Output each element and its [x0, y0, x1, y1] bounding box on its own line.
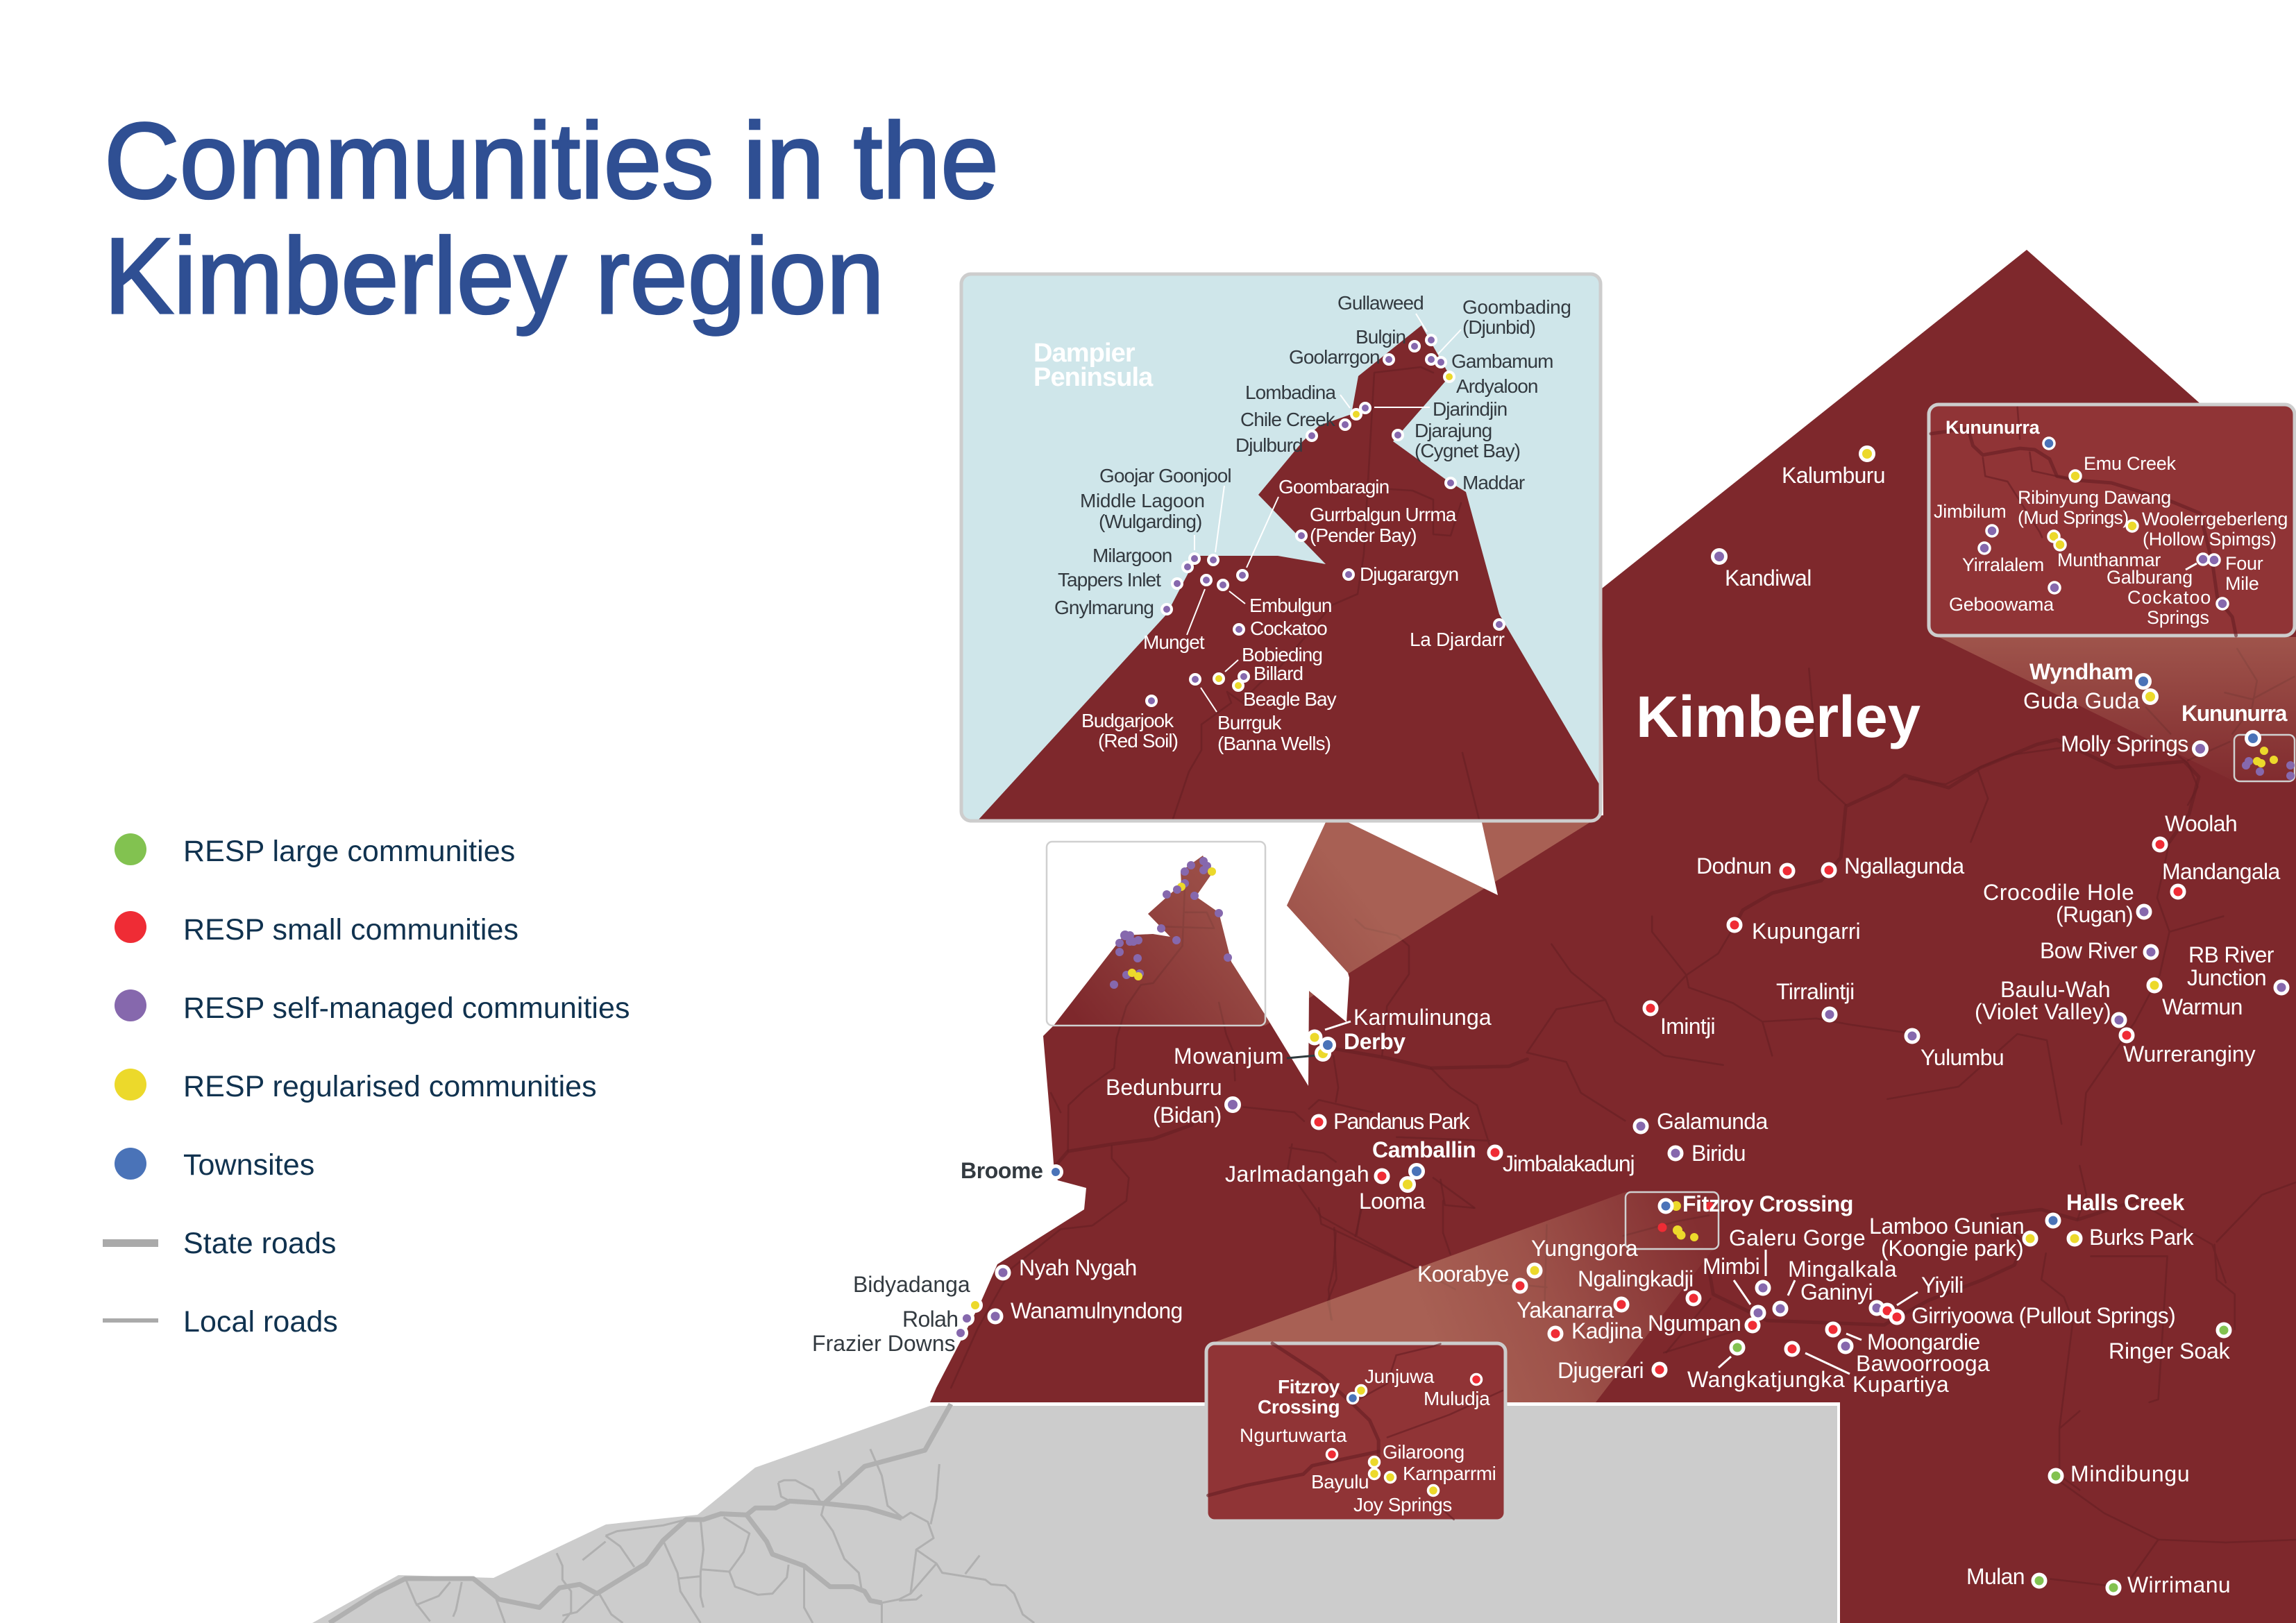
- small locator box: Dampier Peninsula: [1047, 842, 1265, 1026]
- Yakanarra: Yakanarra: [1517, 1298, 1614, 1323]
- Jimbalakadunj: Jimbalakadunj: [1503, 1151, 1635, 1176]
- Geboowama: [1949, 582, 2060, 615]
- map: grey neighbouring land: [312, 1406, 1837, 1623]
- title: Communities in the: [104, 101, 999, 221]
- Woolah: Woolah: [2165, 811, 2237, 836]
- Gurrbalgun Urrma: (Pender Bay): [1310, 525, 1417, 546]
- title: [104, 101, 999, 336]
- Baulu-Wah: [1975, 977, 2125, 1026]
- Burks Park: Burks Park: [2089, 1225, 2195, 1250]
- Galeru Gorge: Galeru Gorge: [1729, 1225, 1865, 1250]
- zoom wedge: Fitzroy Crossing: [1206, 1192, 1719, 1402]
- Fitzroy Crossing town: Crossing: [1258, 1396, 1340, 1418]
- Djarajung: Djarajung: [1415, 420, 1492, 441]
- Bawoorrooga: Bawoorrooga: [1856, 1351, 1990, 1376]
- Cockatoo Springs: Cockatoo: [2127, 587, 2211, 608]
- Mimbi: Mimbi: [1703, 1254, 1759, 1279]
- Galeru Gorge: [1729, 1225, 1865, 1294]
- legend: RESP small communities: RESP small communities: [183, 913, 518, 946]
- Ardyaloon: Ardyaloon: [1456, 375, 1538, 397]
- Wangkatjungka: Wangkatjungka: [1687, 1367, 1845, 1392]
- RB River Junction: Junction: [2187, 965, 2266, 990]
- Moongardie: [1827, 1323, 1980, 1354]
- Yulumbu: Yulumbu: [1921, 1045, 2004, 1070]
- Djugerari: Djugerari: [1558, 1358, 1644, 1383]
- Karnparrmi: Karnparrmi: [1403, 1463, 1496, 1484]
- Embulgun: Embulgun: [1249, 595, 1331, 616]
- Milargoon: [1092, 545, 1192, 572]
- La Djardarr: La Djardarr: [1410, 629, 1505, 650]
- Wangkatjungka: [1687, 1341, 1845, 1392]
- Munget: [1143, 575, 1211, 653]
- inset background: [1206, 1343, 1505, 1521]
- title: Kimberley region: [104, 216, 884, 336]
- panel: Fitzroy Crossing inset: [1206, 1343, 1505, 1521]
- Gambamum: Gambamum: [1451, 350, 1553, 372]
- Tirralintji: Tirralintji: [1776, 979, 1855, 1004]
- Lombadina: [1245, 382, 1361, 419]
- Yiyili: Yiyili: [1921, 1273, 1964, 1298]
- inset border: [961, 274, 1601, 821]
- inset heading: Peninsula: [1033, 363, 1154, 392]
- legend: Local roads: [103, 1305, 338, 1339]
- Gullaweed: Gullaweed: [1337, 292, 1424, 314]
- Dodnun: Dodnun: [1696, 853, 1771, 878]
- Mowanjum: Mowanjum: [1174, 1044, 1283, 1069]
- Kadjina: Kadjina: [1571, 1318, 1643, 1343]
- Frazier Downs: Frazier Downs: [812, 1331, 955, 1356]
- Lamboo Gunian: (Koongie park): [1881, 1236, 2023, 1261]
- Bawoorrooga: [1839, 1340, 1990, 1376]
- Biridu: Biridu: [1691, 1141, 1746, 1166]
- Woolerrgeberleng: (Hollow Spimgs): [2143, 529, 2277, 550]
- Yiyili: [1871, 1273, 1964, 1317]
- legend: RESP self-managed communities: RESP self-managed communities: [183, 992, 630, 1025]
- Ribinyung Dawang: (Mud Springs): [2018, 507, 2129, 528]
- legend: [103, 833, 630, 1339]
- inset roads: [1931, 407, 2236, 636]
- Cockatoo Springs: [2127, 587, 2228, 628]
- legend: State roads: [103, 1227, 336, 1260]
- legend: State roads: State roads: [183, 1227, 336, 1260]
- Guda Guda: Guda Guda: [2023, 688, 2140, 713]
- Geboowama: Geboowama: [1949, 594, 2054, 615]
- legend: Townsites: Townsites: [183, 1148, 314, 1182]
- Djarindjin: [1360, 398, 1507, 420]
- Mandangala: Mandangala: [2162, 859, 2280, 884]
- small locator box: Kununurra: [2234, 735, 2295, 781]
- Ngalingkadji: [1578, 1266, 1700, 1305]
- inset heading: [1033, 339, 1154, 392]
- Crocodile Hole: (Rugan): [2056, 902, 2133, 927]
- Kununurra: Kununurra: [2181, 701, 2288, 726]
- Mandangala: [2162, 859, 2280, 898]
- Galamunda: Galamunda: [1657, 1109, 1768, 1134]
- legend: RESP large communities: RESP large communities: [183, 835, 515, 868]
- Burrguk: [1190, 674, 1331, 754]
- Bow River: Bow River: [2040, 938, 2138, 963]
- Warmun: [2148, 979, 2243, 1019]
- Koorabye: [1417, 1261, 1526, 1292]
- Ringer Soak: Ringer Soak: [2109, 1339, 2231, 1363]
- Djarajung: [1393, 420, 1520, 461]
- Halls Creek: Halls Creek: [2066, 1190, 2185, 1215]
- Koorabye: Koorabye: [1417, 1261, 1509, 1286]
- Ngurtuwarta: [1240, 1425, 1347, 1460]
- panel: Dampier Peninsula inset: [961, 274, 1601, 821]
- Goombaragin: [1238, 476, 1389, 580]
- Girriyoowa: Girriyoowa (Pullout Springs): [1911, 1303, 2175, 1328]
- Moongardie: Moongardie: [1867, 1329, 1980, 1354]
- Burrguk: (Banna Wells): [1217, 733, 1331, 754]
- Gnylmarung: Gnylmarung: [1054, 597, 1154, 618]
- Djarajung: (Cygnet Bay): [1415, 440, 1520, 461]
- Woolah: [2154, 811, 2237, 851]
- Mingalkala: [1788, 1257, 1897, 1295]
- Bedunburru: [1106, 1075, 1240, 1128]
- Jimbilum: [1934, 501, 2007, 536]
- Imintji: [1644, 1002, 1715, 1039]
- Bedunburru: (Bidan): [1153, 1103, 1222, 1128]
- Rolah: Rolah: [902, 1307, 958, 1332]
- Goolarrgon: Goolarrgon: [1289, 346, 1380, 368]
- Gilaroong: Gilaroong: [1383, 1441, 1464, 1463]
- Kununurra town: [1945, 417, 2054, 449]
- Kandiwal: [1713, 550, 1812, 590]
- Kalumburu: Kalumburu: [1782, 463, 1885, 488]
- Karmulinunga: [1308, 1005, 1492, 1044]
- map: Kimberley region: [930, 250, 2296, 1623]
- Lombadina: Lombadina: [1245, 382, 1336, 403]
- Muludja: [1424, 1374, 1490, 1409]
- Embulgun: [1218, 580, 1331, 616]
- Galburang: [2107, 554, 2209, 588]
- Crocodile Hole: [1983, 880, 2150, 927]
- legend: Local roads: Local roads: [183, 1305, 338, 1339]
- Ganinyi: [1774, 1280, 1873, 1315]
- map: Kimberley roads: [951, 649, 2296, 1586]
- communities: main map: [812, 447, 2288, 1597]
- Budgarjook: [1081, 696, 1178, 751]
- inset roads: [1172, 367, 1479, 821]
- Bulgin: Bulgin: [1356, 326, 1406, 348]
- panel: Kununurra inset: [1929, 405, 2295, 636]
- Crocodile Hole: Crocodile Hole: [1983, 880, 2134, 905]
- Ngallagunda: Ngallagunda: [1844, 853, 1964, 878]
- Tappers Inlet: Tappers Inlet: [1058, 569, 1161, 590]
- inset roads: [1208, 1343, 1503, 1520]
- Gullaweed: [1337, 292, 1436, 345]
- inset background: [1929, 405, 2295, 636]
- Four Mile: Mile: [2225, 573, 2259, 594]
- Galburang: Galburang: [2107, 567, 2193, 588]
- RB River Junction: RB River: [2188, 942, 2274, 967]
- Middle Lagoon: (Wulgarding): [1099, 511, 1201, 532]
- RB River Junction: [2187, 942, 2288, 994]
- small locator box: Fitzroy Crossing: [1626, 1192, 1719, 1249]
- Kununurra: [2181, 701, 2288, 745]
- Goombading: (Djunbid): [1462, 316, 1535, 338]
- Yungngora: [1528, 1236, 1638, 1277]
- Woolerrgeberleng: Woolerrgeberleng: [2142, 509, 2288, 529]
- Wirrimanu: Wirrimanu: [2127, 1572, 2230, 1597]
- Goombading: Goombading: [1462, 296, 1571, 318]
- Bulgin: [1356, 326, 1419, 351]
- Ngumpan: Ngumpan: [1648, 1311, 1741, 1336]
- Junjuwa: Junjuwa: [1365, 1366, 1435, 1387]
- Djarindjin: Djarindjin: [1433, 398, 1507, 420]
- Munthanmar: Munthanmar: [2057, 550, 2161, 570]
- Fitzroy Crossing town: Fitzroy: [1278, 1376, 1340, 1397]
- Yirralalem: [1962, 543, 2044, 575]
- Yirralalem: Yirralalem: [1962, 554, 2044, 575]
- Kupartiya: Kupartiya: [1852, 1372, 1949, 1397]
- Middle Lagoon: [1080, 490, 1204, 563]
- inset land: [979, 325, 1599, 819]
- Maddar: Maddar: [1462, 472, 1525, 493]
- map: grey land roads: [330, 1404, 1034, 1623]
- Djugarargyn: Djugarargyn: [1360, 563, 1458, 585]
- Emu Creek: [2070, 453, 2177, 482]
- Middle Lagoon: Middle Lagoon: [1080, 490, 1204, 511]
- Yulumbu: [1906, 1030, 2004, 1070]
- Kalumburu: [1782, 447, 1885, 488]
- Derby: Derby: [1344, 1029, 1406, 1054]
- Ganinyi: Ganinyi: [1800, 1280, 1873, 1305]
- Imintji: Imintji: [1660, 1014, 1715, 1039]
- Cockatoo: Cockatoo: [1250, 618, 1327, 639]
- Lamboo Gunian: Lamboo Gunian: [1869, 1214, 2024, 1239]
- Bobieding: [1214, 644, 1322, 683]
- legend: Townsites: [115, 1148, 314, 1182]
- Kandiwal: Kandiwal: [1725, 566, 1812, 590]
- Goojar Goonjool: Goojar Goonjool: [1099, 465, 1231, 486]
- Warmun: Warmun: [2162, 994, 2243, 1019]
- Goombading: [1438, 296, 1571, 354]
- legend: RESP regularised communities: RESP regularised communities: [183, 1070, 597, 1103]
- Pandanus Park: Pandanus Park: [1333, 1109, 1471, 1134]
- Camballin: Camballin: [1372, 1137, 1476, 1162]
- Baulu-Wah: (Violet Valley): [1975, 999, 2111, 1024]
- Looma: [1359, 1178, 1425, 1214]
- Jarlmadangah: Jarlmadangah: [1225, 1162, 1369, 1187]
- Budgarjook: (Red Soil): [1098, 730, 1178, 751]
- Budgarjook: Budgarjook: [1081, 710, 1174, 731]
- Kupungarri: Kupungarri: [1752, 919, 1860, 944]
- Gurrbalgun Urrma: Gurrbalgun Urrma: [1310, 504, 1457, 525]
- Wurreranginy: [2120, 1029, 2256, 1067]
- Ribinyung Dawang: [2018, 487, 2171, 550]
- zoom wedge: Dampier Peninsula: [1092, 823, 1589, 1026]
- Bobieding: Bobieding: [1242, 644, 1322, 665]
- Munget: Munget: [1143, 631, 1205, 653]
- Bidyadanga: [853, 1272, 981, 1311]
- Tirralintji: [1776, 979, 1855, 1021]
- Halls Creek: [2047, 1190, 2185, 1227]
- Muludja: Muludja: [1424, 1388, 1490, 1409]
- Fitzroy Crossing: Fitzroy Crossing: [1682, 1191, 1853, 1216]
- Bedunburru: Bedunburru: [1106, 1075, 1222, 1100]
- Yungngora: Yungngora: [1531, 1236, 1638, 1261]
- Jimbilum: Jimbilum: [1934, 501, 2007, 522]
- Gurrbalgun Urrma: [1297, 504, 1457, 546]
- Karmulinunga: Karmulinunga: [1353, 1005, 1492, 1030]
- Beagle Bay: [1233, 681, 1337, 710]
- Lamboo Gunian: [1869, 1214, 2036, 1261]
- Camballin: [1372, 1137, 1476, 1178]
- Kupartiya: [1786, 1343, 1949, 1397]
- Molly Springs: Molly Springs: [2061, 731, 2188, 756]
- Nyah Nygah: Nyah Nygah: [1019, 1255, 1137, 1280]
- Bidyadanga: Bidyadanga: [853, 1272, 970, 1297]
- Burrguk: Burrguk: [1217, 712, 1282, 733]
- Wurreranginy: Wurreranginy: [2123, 1042, 2256, 1067]
- Woolerrgeberleng: [2127, 509, 2288, 550]
- Broome: Broome: [961, 1158, 1043, 1183]
- Four Mile: [2209, 553, 2263, 594]
- Wyndham: Wyndham: [2029, 659, 2134, 684]
- Goombaragin: Goombaragin: [1278, 476, 1389, 498]
- Looma: Looma: [1359, 1189, 1425, 1214]
- Baulu-Wah: Baulu-Wah: [2000, 977, 2110, 1002]
- Fitzroy Crossing town: [1258, 1376, 1366, 1418]
- Djulburd: Djulburd: [1235, 434, 1303, 456]
- Mindibungu: Mindibungu: [2070, 1461, 2189, 1486]
- Ngurtuwarta: Ngurtuwarta: [1240, 1425, 1347, 1446]
- inset background: [961, 274, 1601, 821]
- Mimbi: [1703, 1254, 1764, 1319]
- Four Mile: Four: [2225, 553, 2263, 574]
- Emu Creek: Emu Creek: [2084, 453, 2177, 474]
- Kununurra town: Kununurra: [1945, 417, 2041, 438]
- Beagle Bay: Beagle Bay: [1243, 688, 1337, 710]
- Billard: Billard: [1253, 663, 1303, 684]
- Ngalingkadji: Ngalingkadji: [1578, 1266, 1694, 1291]
- zoom wedge: Kununurra: [1939, 637, 2296, 765]
- inset heading: Dampier: [1033, 339, 1136, 368]
- Wanamulnyndong: Wanamulnyndong: [1011, 1298, 1183, 1323]
- Cockatoo Springs: Springs: [2147, 607, 2209, 628]
- Chile Creek: Chile Creek: [1240, 409, 1336, 430]
- Ribinyung Dawang: Ribinyung Dawang: [2018, 487, 2171, 508]
- Goojar Goonjool: [1099, 465, 1231, 565]
- Bayulu: Bayulu: [1311, 1471, 1369, 1493]
- heading: Kimberley: Kimberley: [1636, 684, 1921, 749]
- Joy Springs: Joy Springs: [1353, 1494, 1452, 1515]
- Mingalkala: Mingalkala: [1788, 1257, 1897, 1282]
- Milargoon: Milargoon: [1092, 545, 1172, 566]
- Mulan: Mulan: [1966, 1564, 2025, 1589]
- Ringer Soak: [2109, 1324, 2231, 1363]
